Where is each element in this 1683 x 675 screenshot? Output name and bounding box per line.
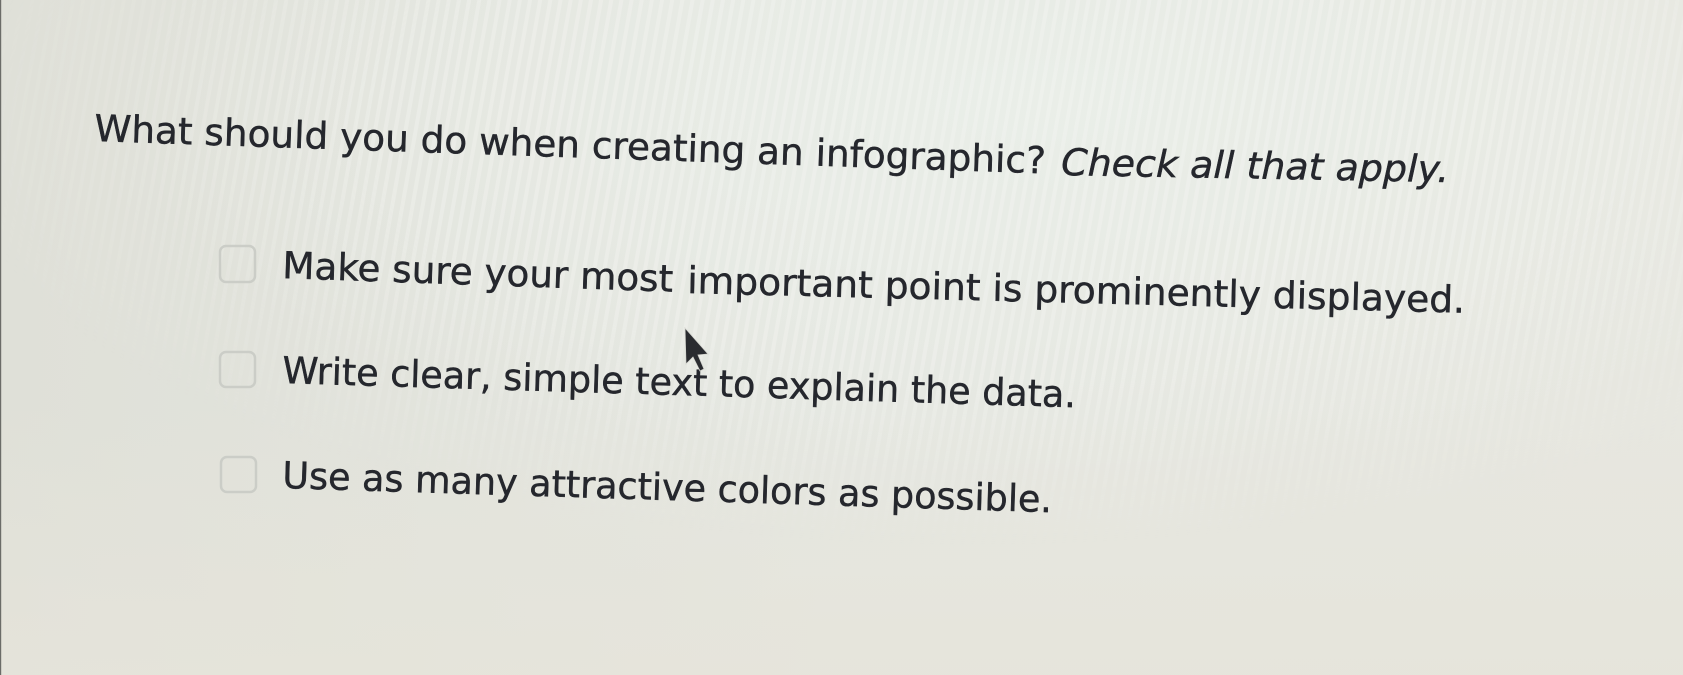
- option 3: Use as many attractive colors as possible.: [282, 454, 1053, 521]
- option 1: important point is prominently displayed.: [687, 259, 1466, 322]
- option 2: Write clear, simple text to explain the data.: [282, 349, 1077, 416]
- icon: mouse cursor: [685, 328, 708, 371]
- checkbox 1: [220, 246, 255, 282]
- option 1: Make sure your most: [282, 244, 674, 301]
- question heading: Check all that apply.: [1061, 141, 1450, 191]
- question heading: [94, 107, 1450, 191]
- checkbox 2: [220, 352, 255, 387]
- checkbox 3: [221, 457, 256, 492]
- question heading: What should you do when creating an infographic?: [94, 107, 1047, 182]
- option 1: [220, 244, 1466, 322]
